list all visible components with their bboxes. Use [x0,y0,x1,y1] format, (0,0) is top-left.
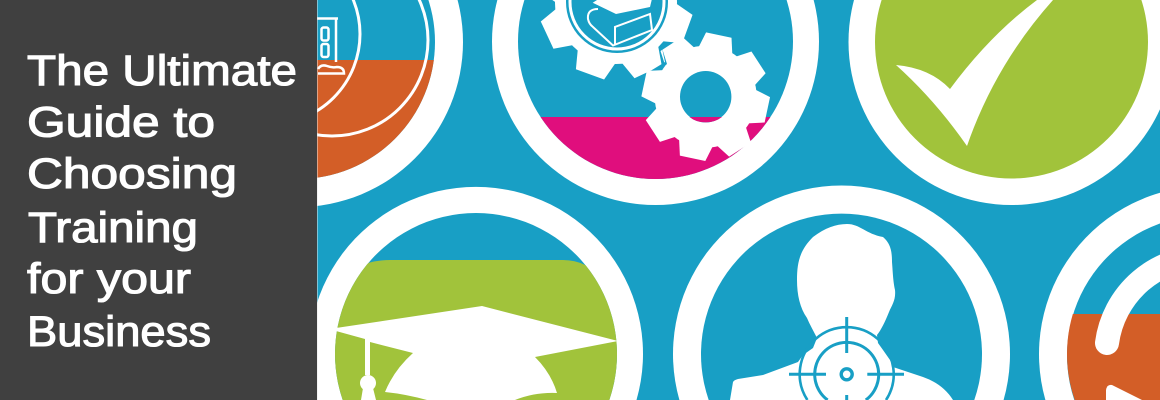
circle: check mark badge [848,0,1160,205]
panel edge [317,0,318,400]
circle: gears and book badge [492,0,819,205]
icon: building [316,18,344,74]
circle: graduation cap badge [309,187,643,400]
title: Choosing [27,151,237,198]
title: for your [27,256,191,303]
icon: crosshair target [789,317,904,400]
title: The Ultimate [27,48,297,95]
icon: person silhouette [730,224,953,400]
icon: graduation cap [336,306,618,400]
title: Training [28,205,198,252]
gap between gears [652,48,667,70]
circle: play button badge [1039,186,1160,400]
title: Guide to [27,100,215,146]
circle: building badge [317,0,463,206]
small gear hole [680,71,731,122]
icon: book [588,0,652,46]
icon: check mark [896,0,1053,146]
title [27,48,297,356]
icon: large gear with book [537,0,695,82]
panel: title background [0,0,317,400]
icon: small gear [640,31,771,162]
title: Business [27,309,211,356]
icon: curved arrow stroke [1107,257,1160,343]
icon: play triangle [1106,385,1142,400]
circle: target person badge [673,186,1010,400]
